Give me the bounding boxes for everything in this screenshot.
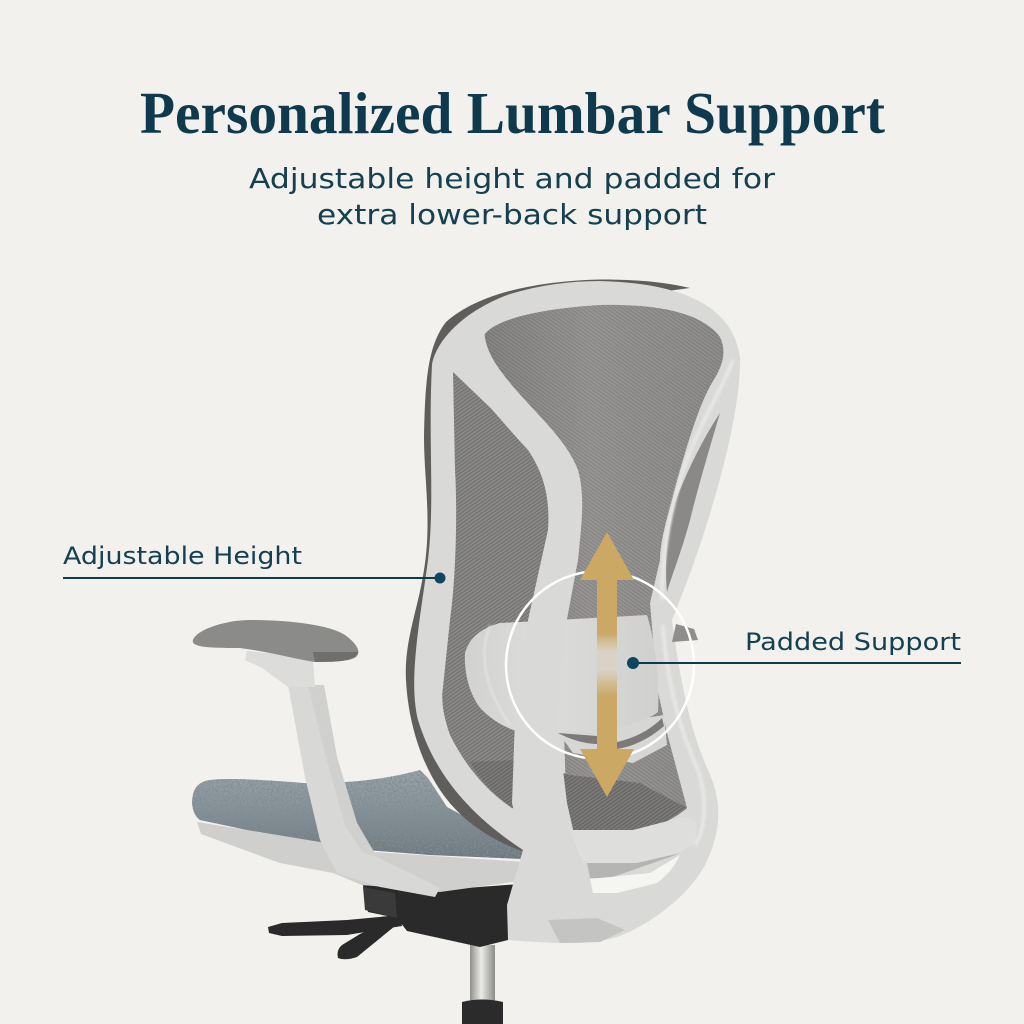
lower dark mesh xyxy=(470,760,687,830)
upper and centre mesh panel xyxy=(482,305,723,830)
armrest neck xyxy=(245,651,315,687)
frame base vents xyxy=(548,918,625,943)
seat cushion xyxy=(192,770,523,859)
callout: adjustable height xyxy=(63,542,446,584)
callout: padded support xyxy=(627,628,961,669)
circle highlight xyxy=(506,571,694,759)
chair illustration xyxy=(192,280,740,1024)
armrest pad xyxy=(193,620,358,662)
height arrow xyxy=(580,532,634,797)
right inner strap highlights xyxy=(662,360,733,845)
gap below back xyxy=(587,853,680,893)
callout: adjustable height: Adjustable Height xyxy=(63,542,302,570)
right mesh sliver xyxy=(666,413,720,592)
callout: padded support: Padded Support xyxy=(745,628,961,656)
subtitle: extra lower-back support xyxy=(317,198,707,231)
armrest post shaded edge xyxy=(308,685,377,857)
right bracket tab xyxy=(672,624,698,642)
back frame xyxy=(414,281,740,943)
armrest post xyxy=(288,685,440,897)
title: Personalized Lumbar Support xyxy=(140,80,885,146)
left mesh panel xyxy=(442,372,552,808)
bottom frame bar xyxy=(570,817,697,863)
subtitle: Adjustable height and padded for xyxy=(249,162,776,195)
lumbar pad xyxy=(465,615,667,763)
central Y strap xyxy=(450,307,597,943)
gas lift pole and base xyxy=(462,945,503,1024)
seat shell xyxy=(197,822,527,892)
back dark edge xyxy=(406,280,690,852)
control levers and mechanism xyxy=(268,883,533,959)
